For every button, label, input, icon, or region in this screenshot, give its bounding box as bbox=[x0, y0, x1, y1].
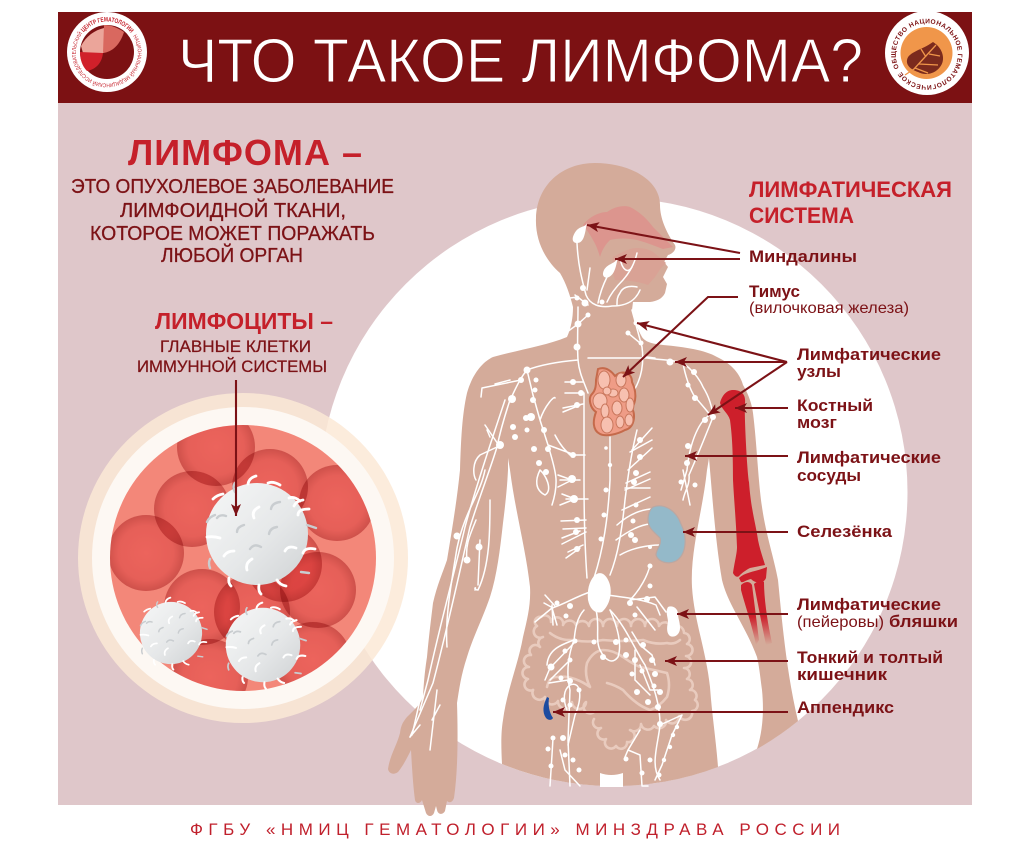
logo: hematology centre: ЦЕНТР ГЕМАТОЛОГИИ bbox=[80, 17, 134, 33]
label: tonsils: Миндалины bbox=[749, 248, 857, 266]
label: tonsils bbox=[587, 225, 857, 266]
heading: lymphatic system bbox=[749, 177, 952, 228]
label: Peyer's patches: бляшки bbox=[889, 613, 958, 631]
label: lymph nodes: Лимфатические bbox=[797, 346, 941, 364]
title: ЧТО ТАКОЕ ЛИМФОМА? bbox=[178, 27, 863, 96]
label: Peyer's patches bbox=[677, 596, 958, 631]
lymphocyte: large bbox=[206, 476, 316, 594]
vessels: head and neck bbox=[567, 243, 643, 393]
heading: lymphoma definition: ЛИМФОМА – bbox=[128, 132, 362, 173]
label: thymus: Тимус bbox=[749, 283, 800, 301]
label: bone marrow: мозг bbox=[797, 414, 837, 432]
arrows: lymph nodes bbox=[637, 323, 787, 415]
lymphatic system: vessels and nodes bbox=[410, 222, 716, 786]
footer text: ФГБУ «НМИЦ ГЕМАТОЛОГИИ» МИНЗДРАВА РОССИИ bbox=[190, 820, 840, 839]
arrows: tonsils bbox=[587, 225, 740, 259]
heading: lymphatic system: ЛИМФАТИЧЕСКАЯ bbox=[749, 177, 952, 202]
vessels: torso bbox=[535, 382, 682, 786]
heading: lymphoma definition: ЭТО ОПУХОЛЕВОЕ ЗАБОЛЕВАНИЕ bbox=[71, 176, 394, 198]
heading: lymphocytes: ЛИМФОЦИТЫ – bbox=[155, 308, 333, 334]
bone marrow: arm bones bbox=[720, 390, 772, 645]
lymph nodes bbox=[454, 222, 716, 778]
crotch gap bbox=[600, 773, 623, 787]
logo: hematology centre: НАЦИОНАЛЬНЫЙ МЕДИЦИНСКИЙ ИССЛЕДОВАТЕЛЬСКИЙ bbox=[72, 31, 142, 88]
label: thymus bbox=[623, 283, 909, 377]
heading: lymphocytes: ГЛАВНЫЕ КЛЕТКИ bbox=[160, 337, 311, 356]
label: lymph vessels: сосуды bbox=[797, 467, 861, 485]
label: intestine bbox=[665, 649, 943, 684]
arrow: intestine bbox=[665, 660, 788, 662]
header band bbox=[58, 12, 972, 103]
organ: thymus bbox=[590, 368, 635, 435]
label: lymph nodes: узлы bbox=[797, 363, 841, 381]
label: thymus: (вилочковая железа) bbox=[749, 300, 909, 317]
arrow: Peyer's patches bbox=[677, 613, 788, 615]
label: Peyer's patches: Лимфатические bbox=[797, 596, 941, 614]
arrow: thymus bbox=[623, 297, 738, 377]
heading: lymphoma definition: ЛИМФОИДНОЙ ТКАНИ, bbox=[120, 198, 346, 222]
label: lymph vessels bbox=[685, 449, 941, 485]
heading: lymphoma definition bbox=[71, 132, 394, 267]
arrow: lymph vessels bbox=[685, 455, 788, 457]
white circle backdrop bbox=[320, 198, 908, 786]
heading: lymphatic system: СИСТЕМА bbox=[749, 203, 854, 228]
heading: lymphoma definition: ЛЮБОЙ ОРГАН bbox=[161, 243, 303, 267]
panel: blood cells magnified circle bbox=[78, 393, 408, 723]
heading: lymphoma definition: КОТОРОЕ МОЖЕТ ПОРАЖАТЬ bbox=[90, 223, 375, 245]
arrow: lymphocytes bbox=[235, 380, 237, 516]
label: intestine: Тонкий и толтый bbox=[797, 649, 943, 667]
vessels: left arm bbox=[410, 360, 585, 750]
sinus and throat areas bbox=[583, 206, 673, 285]
label: lymph nodes bbox=[637, 323, 941, 415]
intestines bbox=[522, 615, 698, 749]
label: bone marrow: Костный bbox=[797, 397, 873, 415]
red blood cells on pink disc bbox=[110, 425, 376, 691]
label: intestine: кишечник bbox=[797, 666, 888, 684]
heading: lymphocytes: ИММУННОЙ СИСТЕМЫ bbox=[137, 357, 327, 376]
human body silhouette bbox=[388, 163, 798, 816]
heading: lymphocytes bbox=[137, 308, 333, 376]
vessels: right arm bbox=[588, 357, 713, 505]
organ: spleen bbox=[648, 506, 685, 563]
label: Peyer's patches: (пейеровы) bbox=[797, 614, 884, 631]
label: appendix: Аппендикс bbox=[797, 699, 894, 717]
arrow: bone marrow bbox=[735, 407, 788, 409]
label: bone marrow bbox=[735, 397, 873, 432]
label: spleen: Селезёнка bbox=[797, 523, 893, 541]
lymphocyte: small right bbox=[226, 603, 306, 689]
logo: national hematology society: ОБЩЕСТВО НАЦИОНАЛЬНОЕ ГЕМАТОЛОГИЧЕСКОЕ bbox=[891, 18, 962, 90]
label: lymph vessels: Лимфатические bbox=[797, 449, 941, 467]
organ: appendix bbox=[543, 697, 553, 720]
logo: hematology centre bbox=[67, 12, 147, 92]
arrow: appendix bbox=[553, 711, 788, 713]
lymphocyte: small left bbox=[140, 598, 207, 670]
arrow: spleen bbox=[683, 531, 788, 533]
